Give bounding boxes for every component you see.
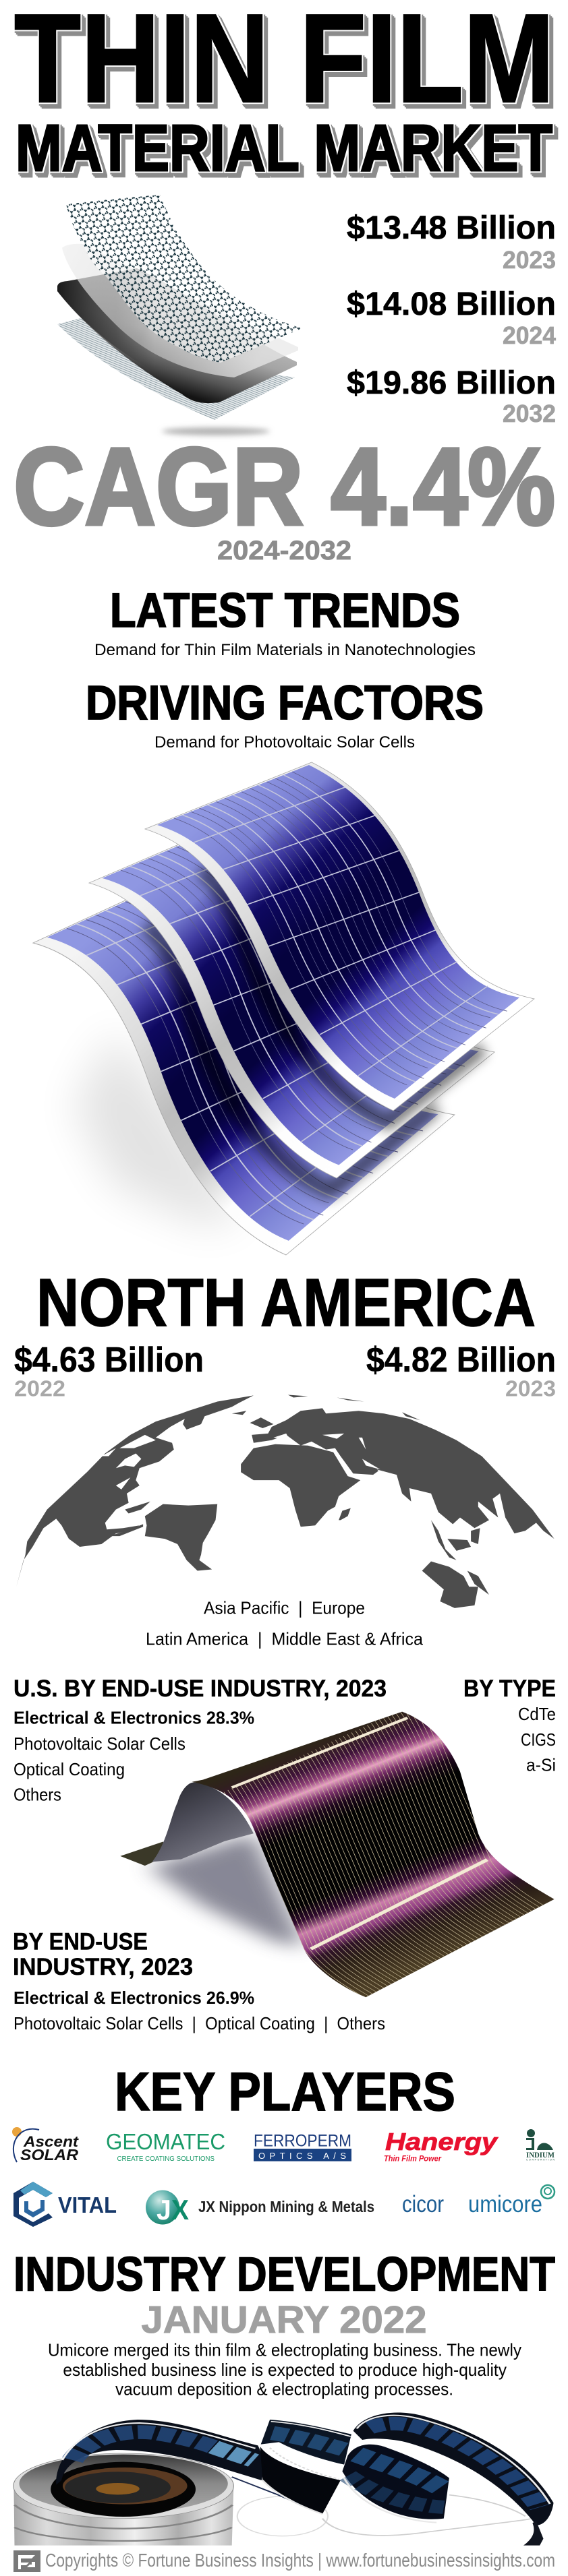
footer (0, 2546, 568, 2576)
list: u.s. end-use segments (13, 1708, 254, 1805)
heading: by end-use industry: INDUSTRY, 2023 (13, 1954, 193, 1980)
stat: 2023 market size: $13.48 Billion (347, 210, 556, 246)
stat: north america 2022: $4.63 Billion (14, 1341, 204, 1380)
text: development description: vacuum deposition & electroplating processes. (115, 2379, 453, 2399)
logo: jx nippon mining and metals: JX Nippon Mining & Metals (198, 2198, 374, 2215)
logo: vital (13, 2182, 117, 2227)
logo: ferroperm (254, 2131, 351, 2161)
cagr callout: 2024-2032 (217, 536, 351, 565)
stat: 2023 market size (347, 210, 556, 274)
logo: ferroperm: FERROPERM (254, 2131, 351, 2150)
logo: hanergy: Hanergy (385, 2128, 499, 2155)
stat: 2024 market size (347, 286, 556, 349)
stat: 2024 market size: 2024 (503, 321, 556, 349)
stat: 2024 market size: $14.08 Billion (347, 286, 556, 322)
list: end-use segments (13, 1988, 385, 2033)
solar panel: front shadow (202, 869, 482, 1122)
illustration: film reel (13, 2412, 554, 2546)
text: development description: established business line is expected to produce high-quality (63, 2360, 507, 2380)
solar panel: middle (72, 797, 509, 1188)
list: types: CIGS (521, 1729, 556, 1750)
list: end-use segments: Photovoltaic Solar Cells | Optical Coating | Others (13, 2013, 385, 2033)
heading: by type: BY TYPE (463, 1676, 556, 1702)
logo: geomatec: GEOMATEC (106, 2129, 225, 2154)
logo: hanergy (384, 2128, 499, 2164)
heading: u.s. by end-use industry: U.S. BY END-USE INDUSTRY, 2023 (13, 1676, 387, 1702)
stat: 2023 market size: 2023 (503, 246, 556, 274)
world map (16, 1395, 555, 1608)
text: latest trends detail: Demand for Thin Film Materials in Nanotechnologies (94, 641, 476, 659)
list: end-use segments: Electrical & Electronics 26.9% (13, 1988, 254, 2008)
stat: 2032 market size: 2032 (503, 400, 556, 427)
logo: cicor: cicor (402, 2191, 444, 2217)
list: u.s. end-use segments: Others (13, 1785, 61, 1805)
logo: umicore: umicore (468, 2191, 542, 2217)
heading: key players: KEY PLAYERS (115, 2062, 455, 2122)
heading: latest trends: LATEST TRENDS (110, 584, 460, 638)
illustration: flexible solar film (120, 1701, 555, 2010)
stat: north america 2022 (14, 1341, 204, 1401)
logo: jx nippon mining and metals (146, 2190, 374, 2226)
stat: 2032 market size (347, 365, 556, 427)
logos: key players (12, 2127, 555, 2227)
stat: north america 2022: 2022 (14, 1376, 65, 1401)
logo: hanergy: Thin Film Power (384, 2154, 442, 2164)
logo: indium: INDIUM (526, 2150, 555, 2159)
list: u.s. end-use segments: Optical Coating (13, 1759, 125, 1779)
heading: driving factors: DRIVING FACTORS (86, 677, 484, 730)
list: types (518, 1704, 556, 1775)
list: types: a-Si (526, 1755, 556, 1775)
logo: geomatec: CREATE COATING SOLUTIONS (117, 2155, 215, 2163)
illustration: solar panels (7, 762, 534, 1272)
logo: indium: CORPORATION (526, 2158, 555, 2161)
text: other regions (146, 1598, 424, 1649)
solar panel: middle shadow (132, 914, 447, 1198)
illustration: layered thin film (57, 195, 302, 435)
heading: january 2022: JANUARY 2022 (142, 2298, 426, 2341)
heading: by end-use industry: BY END-USE (13, 1929, 148, 1955)
text: driving factors detail: Demand for Photovoltaic Solar Cells (154, 733, 415, 752)
list: u.s. end-use segments: Photovoltaic Solar Cells (13, 1734, 186, 1754)
solar panel: front (145, 762, 534, 1111)
logo: vital: VITAL (58, 2192, 117, 2217)
logo: ascent solar: SOLAR (20, 2146, 78, 2164)
text: other regions: Asia Pacific | Europe (204, 1598, 365, 1618)
stat: north america 2023: $4.82 Billion (366, 1341, 556, 1380)
text: development description: Umicore merged its thin film & electroplating business. The newly (48, 2340, 521, 2360)
logo: ascent solar (12, 2127, 80, 2164)
logo: indium (526, 2129, 555, 2161)
stat: north america 2023 (366, 1341, 556, 1401)
heading: by end-use industry (13, 1929, 193, 1980)
stat: north america 2023: 2023 (505, 1376, 556, 1401)
list: types: CdTe (518, 1704, 556, 1724)
list: u.s. end-use segments: Electrical & Electronics 28.3% (13, 1708, 254, 1728)
stat: 2032 market size: $19.86 Billion (347, 365, 556, 401)
title (14, 0, 555, 185)
footer logo (13, 2550, 40, 2572)
text: other regions: Latin America | Middle East & Africa (146, 1628, 424, 1649)
text: development description (48, 2340, 521, 2399)
logo: ascent solar: Ascent (23, 2133, 80, 2150)
logo: jx nippon mining and metals: JX (157, 2194, 189, 2226)
logo: ferroperm: OPTICS A/S (258, 2151, 346, 2161)
solar panel: back (7, 838, 476, 1272)
